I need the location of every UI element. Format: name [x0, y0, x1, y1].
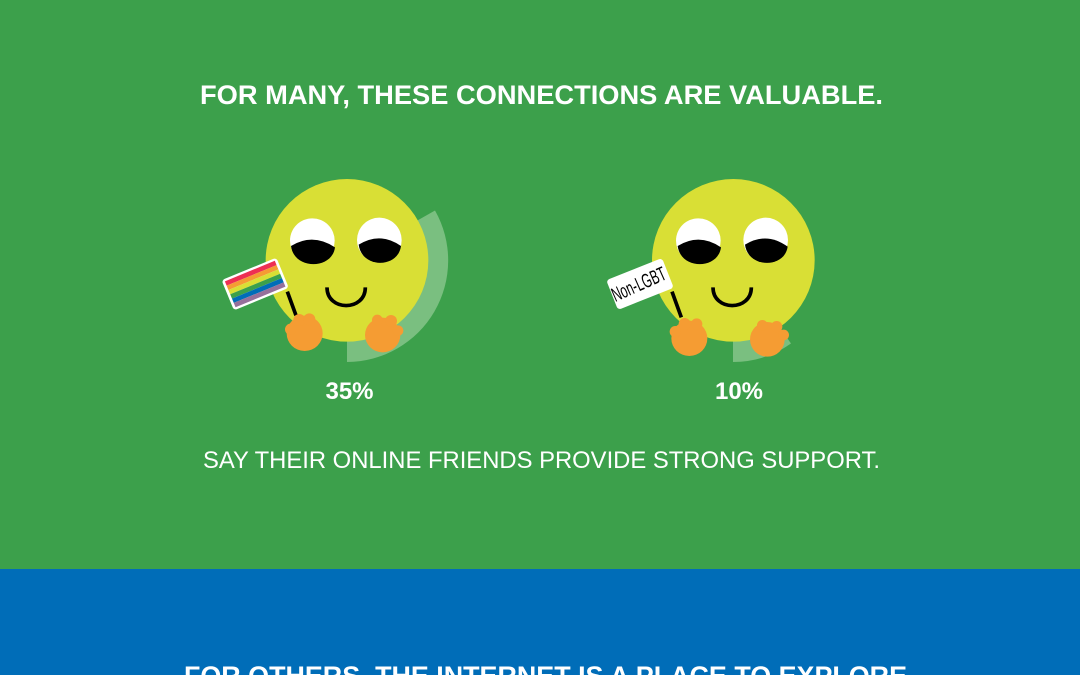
text: online friends support: SAY THEIR ONLINE FRIENDS PROVIDE STRONG SUPPORT. — [203, 447, 880, 474]
icon: non-LGBT emoji with sign: Non-LGBT — [608, 263, 670, 307]
chart: 35 percent wedge — [347, 210, 448, 362]
label: 35%: 35% — [325, 378, 374, 405]
heading: valuable connections: FOR MANY, THESE CONNECTIONS ARE VALUABLE. — [200, 80, 883, 110]
chart: 10 percent wedge — [733, 260, 791, 362]
label: 10%: 10% — [715, 378, 763, 405]
icon: non-LGBT emoji with sign — [606, 179, 815, 357]
icon: LGBT emoji with rainbow flag — [222, 179, 428, 352]
panel: blue section — [0, 569, 1080, 675]
